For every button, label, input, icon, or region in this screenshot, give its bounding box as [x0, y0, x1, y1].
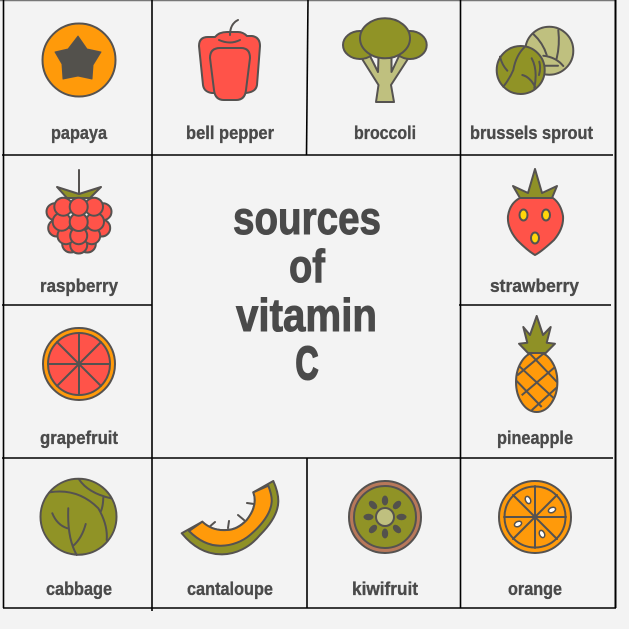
icon: brussels sprout — [497, 27, 573, 94]
cell: cabbage — [40, 479, 116, 599]
cell: grapefruit — [40, 328, 118, 448]
label: kiwifruit: kiwifruit — [352, 579, 418, 599]
icon: papaya — [42, 24, 116, 96]
icon: broccoli — [343, 18, 427, 102]
icon: grapefruit — [43, 328, 115, 400]
cell: raspberry — [40, 170, 118, 296]
cell: strawberry — [490, 169, 579, 296]
icon: cabbage — [40, 479, 116, 555]
heading: sources of vitamin C: of — [289, 240, 326, 292]
label: strawberry: strawberry — [490, 276, 579, 296]
cell: papaya — [42, 24, 116, 143]
label: broccoli: broccoli — [354, 123, 416, 143]
label: orange: orange — [508, 579, 562, 599]
cell: broccoli — [343, 18, 427, 143]
label: raspberry: raspberry — [40, 276, 118, 296]
heading: sources of vitamin C — [233, 192, 381, 389]
icon: strawberry — [508, 169, 563, 255]
icon: cantaloupe — [182, 481, 278, 554]
label: cabbage: cabbage — [46, 579, 112, 599]
label: brussels sprout: brussels sprout — [470, 123, 593, 143]
label: papaya: papaya — [51, 123, 108, 143]
icon: orange — [499, 481, 571, 553]
icon: pineapple — [516, 316, 557, 412]
cell: orange — [499, 481, 571, 599]
cell: pineapple — [497, 316, 573, 448]
cell: brussels sprout — [470, 27, 593, 143]
icon: bell pepper — [199, 20, 260, 100]
label: grapefruit: grapefruit — [40, 428, 118, 448]
label: pineapple: pineapple — [497, 428, 573, 448]
heading: sources of vitamin C: vitamin — [236, 289, 377, 341]
cell: bell pepper — [186, 20, 274, 143]
heading: sources of vitamin C: C — [296, 337, 318, 389]
icon: raspberry — [46, 170, 112, 254]
cell: cantaloupe — [182, 481, 278, 599]
icon: kiwifruit — [349, 481, 421, 553]
label: cantaloupe: cantaloupe — [187, 579, 273, 599]
cell: kiwifruit — [349, 481, 421, 599]
label: bell pepper: bell pepper — [186, 123, 274, 143]
heading: sources of vitamin C: sources — [233, 192, 381, 244]
